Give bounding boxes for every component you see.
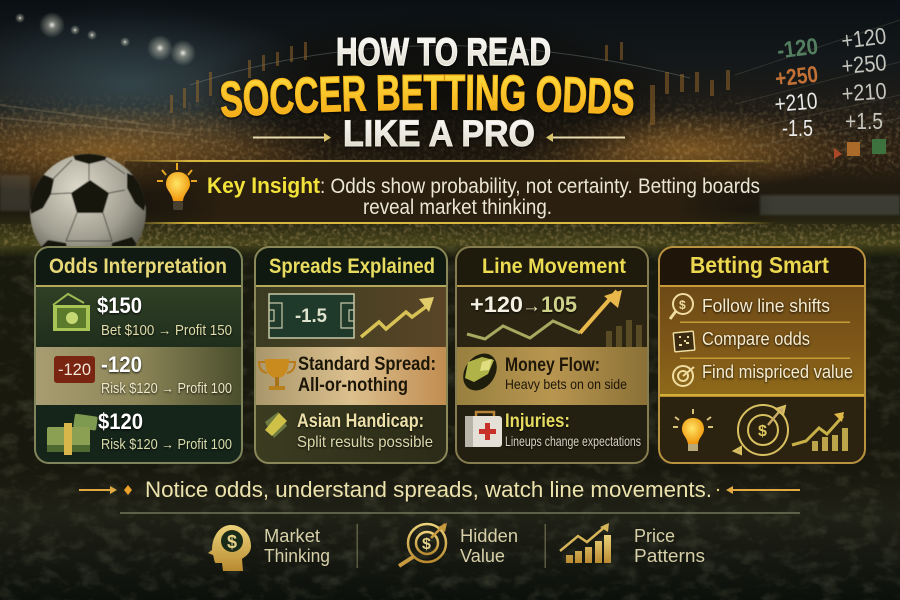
label: price patterns: [634, 526, 705, 566]
icon: dollar target: [734, 405, 788, 455]
icon: magnifier: [670, 294, 693, 319]
money flow text: [505, 355, 627, 392]
line odds: 105: [541, 292, 577, 317]
line odds: [470, 292, 577, 317]
icon: market thinking head: $: [227, 532, 237, 552]
heading: Betting Smart: [690, 252, 829, 278]
line chart with arrow: [467, 290, 622, 339]
icon: rising arrow: [361, 297, 434, 337]
icon: compare card: [673, 331, 695, 352]
row: $120: $120: [98, 409, 143, 434]
odds board: +210: [841, 78, 887, 107]
money flow text: Heavy bets on on side: [505, 376, 627, 392]
title: SOCCER BETTING ODDS: [220, 74, 634, 120]
label: market thinking: Thinking: [264, 546, 330, 566]
asian handicap text: Asian Handicap:: [297, 411, 424, 432]
icon: market thinking head: [208, 525, 251, 571]
row: $150: $150: [97, 293, 142, 318]
follow line shifts: Follow line shifts: [702, 296, 830, 316]
icon: money flow: [456, 347, 504, 397]
panel: odds interpretation: [35, 247, 242, 463]
panel: line movement: [456, 247, 648, 463]
injuries text: Lineups change expectations: [505, 433, 641, 449]
asian handicap text: [297, 411, 433, 451]
line odds: →: [522, 296, 541, 317]
injuries text: [505, 411, 641, 449]
odds board: +120: [840, 22, 888, 54]
icon: target: [673, 366, 694, 386]
row: -120: [101, 352, 232, 397]
icon: cash stack: [47, 414, 98, 455]
icon: price patterns chart: [560, 523, 611, 563]
key insight text: [207, 173, 760, 219]
key insight text: : Odds show probability, not certainty. Betting boards: [320, 175, 760, 198]
row: -120: -120: [101, 352, 142, 377]
panel: betting smart: [659, 247, 865, 463]
heading: Odds Interpretation: [49, 255, 227, 278]
odds board: -1.5: [782, 115, 813, 141]
title arrow right: [546, 133, 625, 142]
icon: first aid kit: [465, 412, 502, 447]
icon: banknotes: [53, 294, 90, 331]
label: market thinking: [264, 526, 330, 566]
label: hidden value: Hidden: [460, 526, 518, 546]
icon: hidden value target: [399, 523, 447, 566]
label: price patterns: Patterns: [634, 546, 705, 566]
icon: light bulb: [157, 163, 197, 210]
icon: soccer ball: [29, 153, 146, 248]
find mispriced value: Find mispriced value: [702, 362, 853, 382]
label: hidden value: Value: [460, 546, 505, 566]
label: price patterns: Price: [634, 526, 675, 546]
icon: ticket: [265, 412, 287, 438]
heading: Line Movement: [482, 255, 626, 278]
label: market thinking: Market: [264, 526, 320, 546]
title: LIKE A PRO: [343, 113, 535, 154]
icon: dollar target: $: [758, 423, 767, 440]
icon: hidden value target: $: [422, 536, 431, 553]
odds board: +210: [773, 87, 819, 117]
takeaway line: Notice odds, understand spreads, watch line movements.: [145, 477, 712, 502]
icon: pitch with -1.5: [269, 294, 354, 338]
panel: spreads explained: [255, 247, 447, 463]
key insight band: [125, 160, 775, 224]
injuries text: Injuries:: [505, 411, 570, 432]
money flow text: Money Flow:: [505, 355, 600, 376]
standard spread text: [298, 354, 436, 396]
odds board: [735, 20, 900, 159]
label: hidden value: [460, 526, 518, 566]
row: $120: [98, 409, 232, 453]
icon: bulb: [673, 409, 713, 451]
odds board: +250: [774, 61, 819, 92]
row: $150: [97, 293, 232, 339]
odds board: +1.5: [845, 108, 883, 134]
compare odds: Compare odds: [702, 329, 810, 349]
line odds: +120: [470, 292, 523, 317]
key insight text: reveal market thinking.: [363, 196, 552, 219]
icon: trophy: [259, 359, 295, 390]
icon: growth chart: [792, 412, 848, 451]
title arrow left: [253, 133, 331, 142]
row: $120: Risk $120 → Profit 100: [101, 437, 232, 453]
badge: -120: [54, 356, 95, 383]
title: HOW TO READ: [336, 31, 551, 74]
icon: pitch with -1.5: -1.5: [295, 306, 327, 327]
title: [220, 31, 634, 154]
key insight text: Key Insight: [207, 173, 321, 198]
row: $150: Bet $100 → Profit 150: [101, 323, 232, 339]
standard spread text: All-or-nothing: [298, 375, 408, 396]
icon: magnifier: $: [679, 298, 686, 312]
heading: Spreads Explained: [269, 255, 435, 278]
odds board: +250: [840, 49, 888, 79]
odds board: -120: [776, 33, 819, 63]
asian handicap text: Split results possible: [297, 434, 433, 451]
badge: -120: -120: [58, 360, 91, 379]
row: -120: Risk $120 → Profit 100: [101, 381, 232, 397]
standard spread text: Standard Spread:: [298, 354, 436, 375]
